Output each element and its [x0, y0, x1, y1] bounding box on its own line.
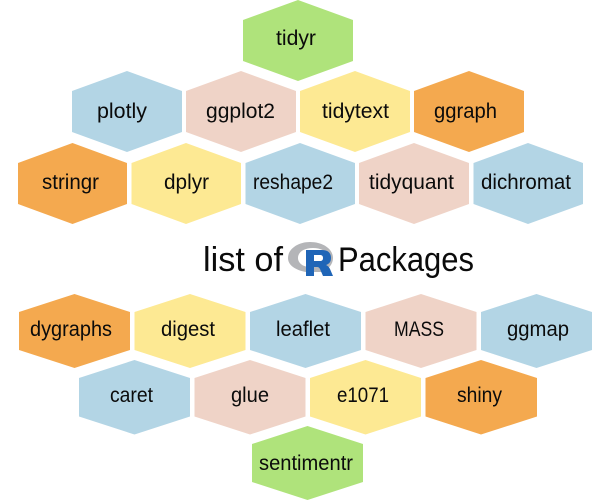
hexagon: sentimentr [252, 426, 363, 500]
hexagon: stringr: stringr [42, 171, 99, 194]
icon: R logo [288, 242, 333, 276]
hexagon: MASS [366, 294, 476, 368]
hexagon: ggraph: ggraph [434, 100, 497, 123]
hexagon: tidytext: tidytext [322, 100, 389, 123]
hexagon: leaflet: leaflet [276, 318, 330, 341]
hexagon: shiny: shiny [457, 384, 502, 407]
hexagon: caret: caret [110, 384, 153, 407]
hexagon: reshape2: reshape2 [253, 171, 333, 194]
hexagon: ggplot2: ggplot2 [206, 100, 275, 123]
hexagon: stringr [18, 143, 127, 224]
hexagon: tidyquant [359, 143, 469, 224]
hexagon: leaflet [250, 294, 361, 368]
hexagon: digest: digest [161, 318, 215, 341]
hexagon: tidyquant: tidyquant [369, 171, 454, 194]
hexagon: glue: glue [231, 384, 269, 407]
hexagon: ggplot2 [186, 71, 296, 152]
hexagon: dygraphs: dygraphs [30, 318, 112, 341]
hexagon: digest [134, 294, 246, 368]
hexagon: e1071: e1071 [337, 384, 389, 407]
hexagon: dygraphs [19, 294, 130, 368]
hexagon: caret [79, 360, 190, 434]
hexagon: glue [194, 360, 306, 434]
hexagon: tidytext [300, 71, 410, 152]
hexagon: ggraph [414, 71, 524, 152]
hexagon: ggmap: ggmap [507, 318, 569, 341]
hexagon: plotly: plotly [97, 100, 148, 123]
title: list of R Packages: Packages [338, 241, 474, 279]
title: list of R Packages: list of [203, 241, 284, 279]
hexagon: e1071 [310, 360, 421, 434]
hexagon: tidyr [243, 0, 353, 81]
hexagon: MASS: MASS [394, 318, 444, 341]
hexagon: dichromat [474, 143, 583, 224]
hexagon: dplyr: dplyr [164, 171, 209, 194]
title: list of R Packages [203, 241, 474, 279]
hexagon: shiny [426, 360, 537, 434]
hexagon: reshape2 [246, 143, 355, 224]
hexagon: dichromat: dichromat [481, 171, 571, 194]
hexagon: tidyr: tidyr [276, 27, 316, 50]
hexagon: dplyr [132, 143, 241, 224]
hexagon: sentimentr: sentimentr [259, 452, 353, 475]
hexagon: plotly [72, 71, 182, 152]
hexagon: ggmap [481, 294, 592, 368]
